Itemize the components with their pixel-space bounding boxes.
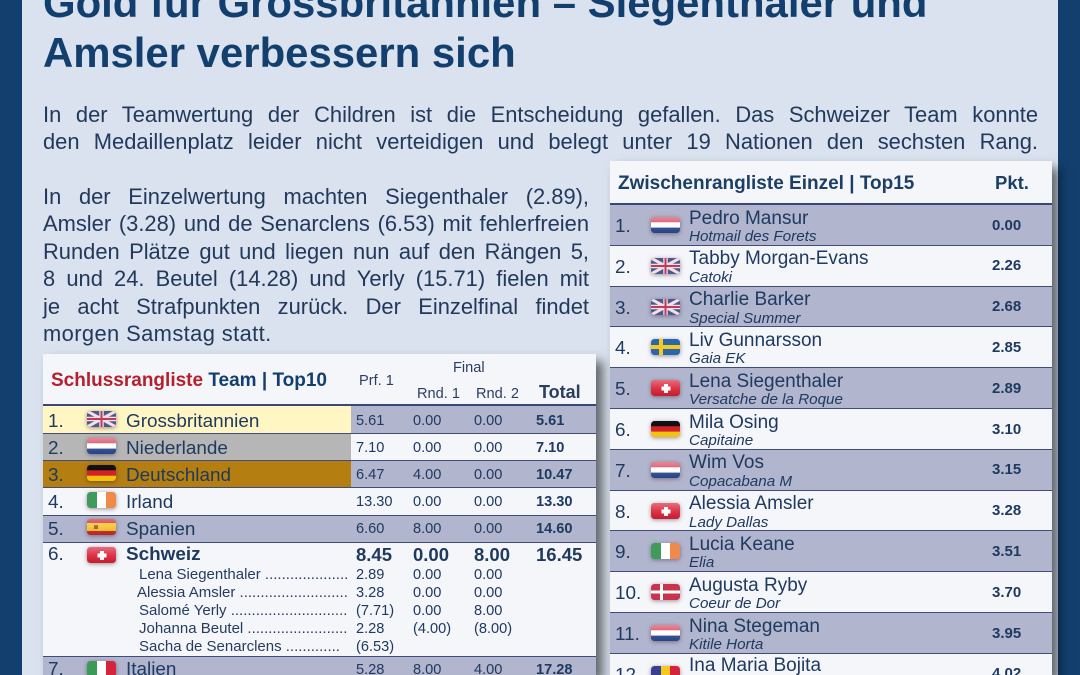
row: Schweiz with riders: (7.71) xyxy=(356,602,394,618)
team table column headers: Final xyxy=(453,360,485,376)
row: Lena Siegenthaler: 2.89 xyxy=(992,380,1021,397)
row: Schweiz with riders: 8.00 xyxy=(474,544,510,564)
row: Grossbritannien: 0.00 xyxy=(413,413,441,429)
row: Grossbritannien: 1. xyxy=(48,411,64,432)
row: Irland: 13.30 xyxy=(356,494,393,510)
row: Augusta Ryby xyxy=(610,572,1052,613)
row: Pedro Mansur: Hotmail des Forets xyxy=(689,228,816,245)
paragraph: individual result: Runden Plätze gut und liegen nun auf den Rängen 5, xyxy=(43,238,589,264)
row: Liv Gunnarsson: Liv Gunnarsson xyxy=(689,330,822,351)
row: Liv Gunnarsson: 2.85 xyxy=(992,339,1021,356)
row: Spanien xyxy=(43,516,596,542)
row: Alessia Amsler: Lady Dallas xyxy=(689,514,768,531)
row: Tabby Morgan-Evans: Catoki xyxy=(689,269,732,286)
row: Grossbritannien xyxy=(43,406,596,434)
row: Irland: 0.00 xyxy=(474,494,502,510)
row: Lucia Keane: 9. xyxy=(615,542,631,563)
row: Alessia Amsler: 8. xyxy=(615,502,631,523)
row: Tabby Morgan-Evans xyxy=(610,246,1052,287)
intro paragraph: team result: In der Teamwertung der Children ist die Entscheidung gefallen. Das Schweizer Team konnte xyxy=(43,102,1038,127)
row: Charlie Barker xyxy=(610,287,1052,327)
row: Schweiz with riders: (8.00) xyxy=(474,620,512,636)
row: Irland: 13.30 xyxy=(536,494,573,510)
row: Schweiz with riders: Lena Siegenthaler .................... xyxy=(139,566,348,582)
row: Tabby Morgan-Evans: 2. xyxy=(615,257,631,278)
paragraph: individual result: je acht Strafpunkten zurück. Der Einzelfinal findet xyxy=(43,294,589,318)
row: Charlie Barker: Special Summer xyxy=(689,310,800,327)
row: Schweiz with riders: 8.45 xyxy=(356,544,392,564)
row: Mila Osing: 3.10 xyxy=(992,420,1021,438)
row: Wim Vos: 7. xyxy=(615,461,631,482)
row: Lucia Keane: Lucia Keane xyxy=(689,534,795,555)
row: Pedro Mansur: 0.00 xyxy=(992,216,1021,234)
row: Niederlande: 7.10 xyxy=(356,440,384,456)
row: Liv Gunnarsson: Gaia EK xyxy=(689,350,746,367)
row: Mila Osing: Mila Osing xyxy=(689,412,779,432)
row: Irland: 0.00 xyxy=(413,494,441,510)
row: Alessia Amsler xyxy=(610,491,1052,531)
row: Schweiz with riders: Schweiz xyxy=(126,544,201,564)
row: Lucia Keane xyxy=(610,531,1052,572)
team table column headers: Prf. 1 xyxy=(359,373,394,389)
row: Pedro Mansur xyxy=(610,205,1052,246)
row: Nina Stegeman: 3.95 xyxy=(992,624,1021,642)
row: Schweiz with riders: 0.00 xyxy=(413,584,441,600)
row: Spanien: Spanien xyxy=(126,519,195,540)
row: Schweiz with riders: 6. xyxy=(48,544,64,564)
row: Lena Siegenthaler: Lena Siegenthaler xyxy=(689,371,843,392)
row: Augusta Ryby: 3.70 xyxy=(992,584,1021,601)
row: Nina Stegeman: Kitile Horta xyxy=(689,636,763,653)
paragraph: individual result: morgen Samstag statt. xyxy=(43,321,272,346)
row: Schweiz with riders: 0.00 xyxy=(474,566,502,582)
row: Augusta Ryby: Coeur de Dor xyxy=(689,595,780,612)
row: Mila Osing: 6. xyxy=(615,420,631,441)
row: Pedro Mansur: 1. xyxy=(615,216,631,237)
team table column headers: Total xyxy=(539,382,581,402)
intro paragraph: team result: den Medaillenplatz leider nicht verteidigen und belegt unter 19 Nationen den sechsten Rang. xyxy=(43,129,1038,154)
row: Deutschland xyxy=(43,460,596,488)
row: Lucia Keane: Elia xyxy=(689,554,714,571)
title: Amsler verbessern sich xyxy=(43,29,516,76)
paragraph: individual result: In der Einzelwertung machten Siegenthaler (2.89), xyxy=(43,184,589,208)
row: Lucia Keane: 3.51 xyxy=(992,543,1021,560)
row: Niederlande xyxy=(43,434,596,460)
row: Italien xyxy=(43,656,596,675)
paragraph: individual result: Amsler (3.28) und de Senarclens (6.53) mit fehlerfreien xyxy=(43,211,589,236)
row: Deutschland: 6.47 xyxy=(356,466,384,482)
row: Schweiz with riders: (4.00) xyxy=(413,620,451,636)
title xyxy=(43,0,927,76)
row: Spanien: 14.60 xyxy=(536,520,573,536)
row: Schweiz with riders: Johanna Beutel ........................ xyxy=(139,620,347,636)
row: Schweiz with riders: 0.00 xyxy=(413,602,441,618)
row: Deutschland: 0.00 xyxy=(474,466,502,482)
row: Pedro Mansur: Pedro Mansur xyxy=(689,208,808,228)
row: Irland: 4. xyxy=(48,492,64,512)
row: Grossbritannien: 5.61 xyxy=(356,413,384,429)
row: Tabby Morgan-Evans: Tabby Morgan-Evans xyxy=(689,248,869,269)
row: Charlie Barker: 2.68 xyxy=(992,298,1021,315)
row: Spanien: 8.00 xyxy=(413,520,441,536)
row: Schweiz with riders: 0.00 xyxy=(413,566,441,582)
row: Nina Stegeman: 11. xyxy=(615,624,640,645)
row: Schweiz with riders: 2.89 xyxy=(356,566,384,582)
row: Grossbritannien: 0.00 xyxy=(474,413,502,429)
row: Schweiz with riders: Alessia Amsler .......................... xyxy=(137,584,348,600)
row: Deutschland: 4.00 xyxy=(413,466,441,482)
row: Grossbritannien: Grossbritannien xyxy=(126,411,259,432)
row: Alessia Amsler: Alessia Amsler xyxy=(689,493,814,514)
row: Niederlande: 0.00 xyxy=(474,440,502,456)
row: Deutschland: 3. xyxy=(48,465,64,486)
row: Grossbritannien: 5.61 xyxy=(536,413,564,429)
row: Ina Maria Bojita xyxy=(610,654,1052,675)
row: Tabby Morgan-Evans: 2.26 xyxy=(992,257,1021,274)
row: Irland xyxy=(43,488,596,516)
row: Schweiz with riders: 3.28 xyxy=(356,584,384,600)
row: Niederlande: 2. xyxy=(48,438,64,458)
row: Alessia Amsler: 3.28 xyxy=(992,502,1021,519)
row: Irland: Irland xyxy=(126,492,173,512)
row: Wim Vos: Copacabana M xyxy=(689,473,792,490)
row: Liv Gunnarsson: 4. xyxy=(615,338,631,359)
row: Lena Siegenthaler: Versatche de la Roque xyxy=(689,391,843,408)
row: Schweiz with riders xyxy=(43,542,596,656)
intro paragraph: team result xyxy=(43,102,1038,154)
team table column headers: Rnd. 1 xyxy=(417,386,460,402)
row: Niederlande: Niederlande xyxy=(126,438,228,458)
row: Lena Siegenthaler xyxy=(610,368,1052,409)
row: Nina Stegeman: Nina Stegeman xyxy=(689,616,820,636)
points column header: Pkt. xyxy=(995,172,1029,193)
row: Augusta Ryby: 10. xyxy=(615,583,641,604)
paragraph: individual result xyxy=(42,184,589,346)
row: Nina Stegeman xyxy=(610,613,1052,654)
row: Charlie Barker: 3. xyxy=(615,298,631,319)
row: Spanien: 5. xyxy=(48,519,64,540)
row: Schweiz with riders: 8.00 xyxy=(474,602,502,618)
row: Liv Gunnarsson xyxy=(610,327,1052,368)
row: Spanien: 6.60 xyxy=(356,520,384,536)
row: Schweiz with riders: 0.00 xyxy=(413,544,449,564)
team table heading: Schlussrangliste Team | Top10 xyxy=(51,370,327,391)
row: Augusta Ryby: Augusta Ryby xyxy=(689,575,807,596)
panel: individual ranking table xyxy=(610,161,1052,675)
row: Schweiz with riders: 16.45 xyxy=(536,544,582,564)
paragraph: individual result: 8 und 24. Beutel (14.28) und Yerly (15.71) fielen mit xyxy=(43,266,589,291)
row: Schweiz with riders: 2.28 xyxy=(356,620,384,636)
row: Deutschland: 10.47 xyxy=(536,466,573,482)
row: Schweiz with riders: Salomé Yerly ............................ xyxy=(139,602,347,618)
row: Charlie Barker: Charlie Barker xyxy=(689,289,810,310)
row: Niederlande: 7.10 xyxy=(536,440,564,456)
row: Mila Osing xyxy=(610,409,1052,450)
row: Deutschland: Deutschland xyxy=(126,465,231,486)
row: Wim Vos xyxy=(610,450,1052,491)
row: Schweiz with riders: 0.00 xyxy=(474,584,502,600)
panel: team ranking table xyxy=(43,354,596,675)
individual table heading: Zwischenrangliste Einzel | Top15 xyxy=(618,173,914,194)
team table column headers: Rnd. 2 xyxy=(476,386,519,402)
row: Niederlande: 0.00 xyxy=(413,440,441,456)
row: Lena Siegenthaler: 5. xyxy=(615,379,631,400)
row: Spanien: 0.00 xyxy=(474,520,502,536)
team table column headers xyxy=(359,360,581,402)
row: Schweiz with riders: (6.53) xyxy=(356,638,394,654)
row: Wim Vos: 3.15 xyxy=(992,461,1021,478)
row: Mila Osing: Capitaine xyxy=(689,432,753,449)
row: Wim Vos: Wim Vos xyxy=(689,452,764,473)
row: Schweiz with riders: Sacha de Senarclens ............. xyxy=(139,638,340,654)
